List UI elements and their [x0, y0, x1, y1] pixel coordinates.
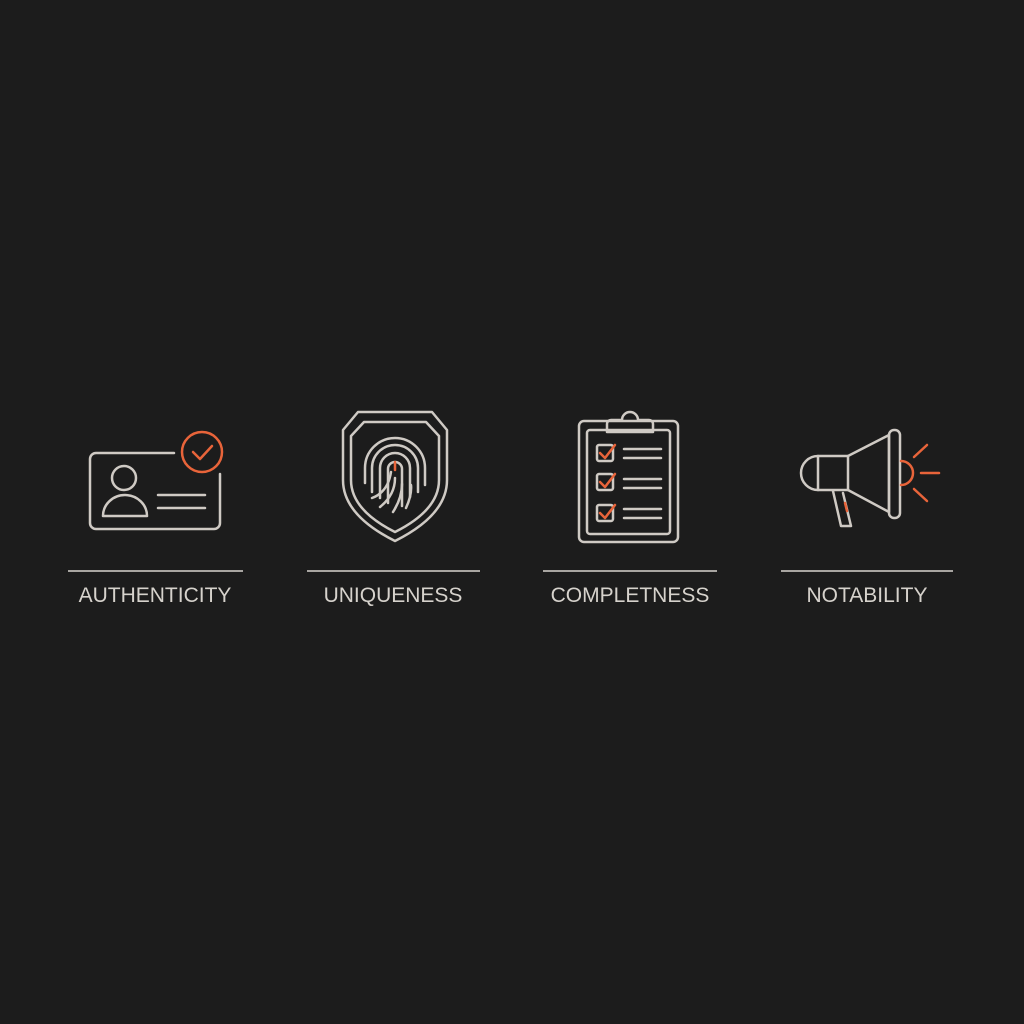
icon: megaphone [801, 430, 939, 526]
icon: clipboard checklist [579, 412, 678, 542]
icon: shield fingerprint [343, 412, 447, 541]
label: uniqueness: UNIQUENESS [324, 584, 462, 607]
label: notability: NOTABILITY [807, 584, 927, 607]
label: authenticity: AUTHENTICITY [79, 584, 231, 607]
icon: ID card with check [90, 432, 222, 529]
dividers [68, 570, 953, 572]
label: completness: COMPLETNESS [551, 584, 709, 607]
